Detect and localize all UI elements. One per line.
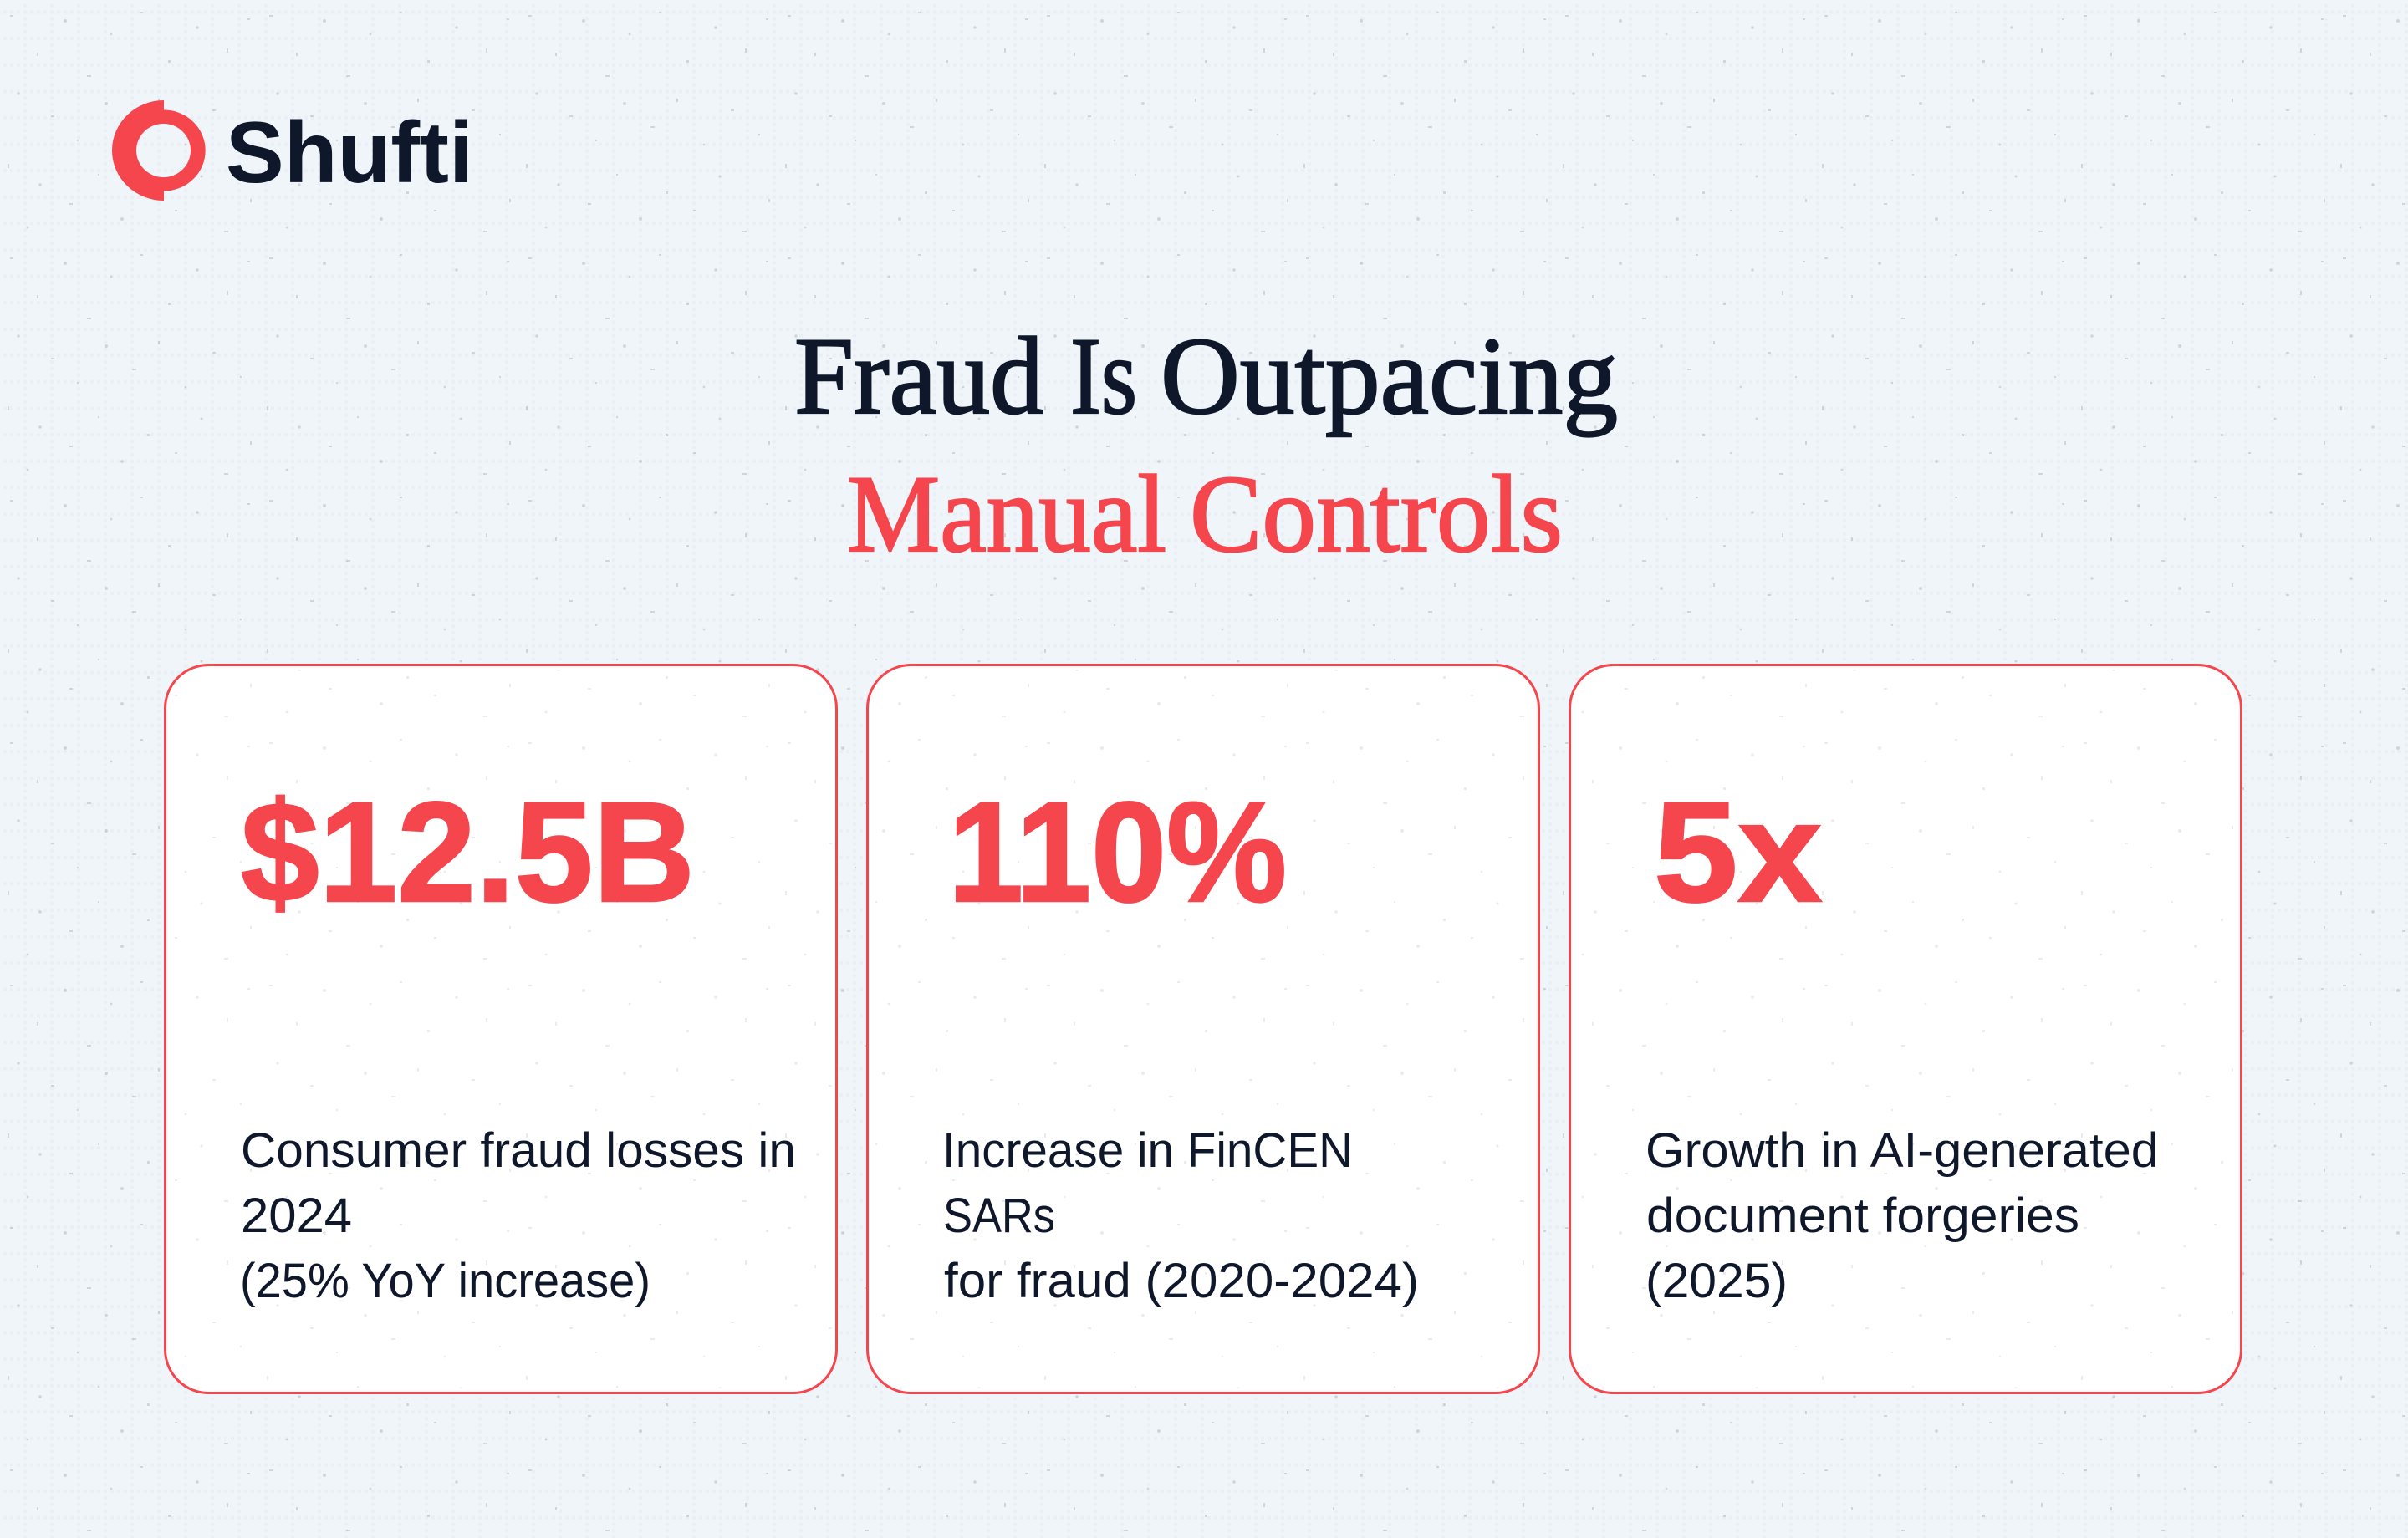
stat: 110%: 110% — [948, 773, 1287, 932]
title line 1: Fraud — [794, 314, 1043, 437]
title line 1 — [794, 314, 1618, 437]
title line 1: Outpacing — [1161, 314, 1618, 437]
title line 2: Controls — [1190, 452, 1563, 575]
icon: red ring mark — [112, 100, 206, 201]
title line 2: Manual — [847, 452, 1166, 575]
description: Consumer fraud losses in — [241, 1123, 796, 1178]
description: for fraud (2020-2024) — [944, 1254, 1419, 1308]
description: Growth in AI-generated — [1645, 1123, 2159, 1178]
title — [794, 314, 1618, 575]
description: document forgeries — [1646, 1189, 2079, 1243]
description: SARs — [943, 1189, 1055, 1243]
panel: FinCEN SARs increase — [868, 665, 1538, 1393]
title line 2 — [847, 452, 1563, 575]
stat: $12.5B: $12.5B — [241, 773, 695, 932]
description — [240, 1123, 796, 1308]
description — [942, 1123, 1419, 1308]
panel: consumer fraud losses — [166, 665, 836, 1393]
stat: 5x: 5x — [1654, 773, 1822, 932]
description — [1645, 1123, 2159, 1308]
description: 2024 — [241, 1189, 352, 1243]
title line 1: Is — [1070, 314, 1137, 437]
logo: Shufti — [112, 100, 473, 201]
wordmark: Shufti — [226, 104, 473, 201]
description: Increase in FinCEN — [942, 1123, 1353, 1178]
description: (25% YoY increase) — [240, 1254, 650, 1308]
description: (2025) — [1645, 1254, 1788, 1308]
panel: AI-generated forgeries — [1570, 665, 2241, 1393]
